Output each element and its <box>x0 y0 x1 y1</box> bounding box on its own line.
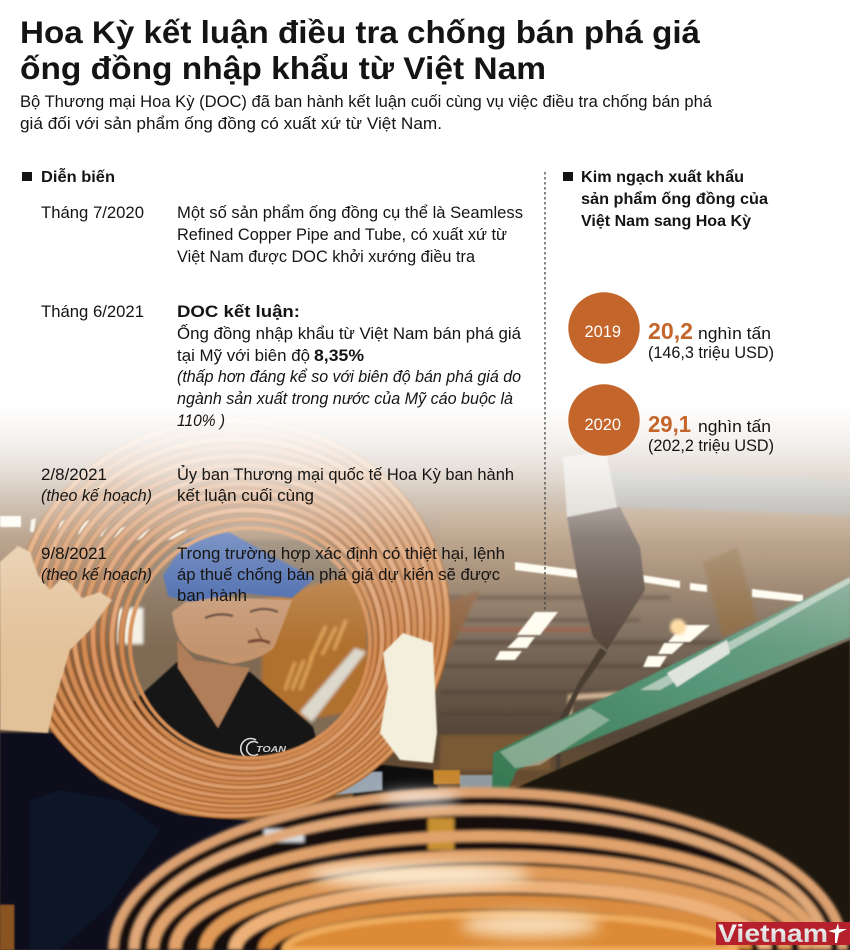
event: July 2020: Tháng 7/2020 <box>41 203 144 222</box>
event: 2 August 2021: 2/8/2021 <box>41 465 107 484</box>
heading: export turnover: Việt Nam sang Hoa Kỳ <box>581 213 751 230</box>
gloves <box>0 546 437 763</box>
stat: 2020 <box>568 384 774 456</box>
event: June 2021: ngành sản xuất trong nước của Mỹ cáo buộc là <box>177 389 513 408</box>
event: July 2020: Refined Copper Pipe and Tube, có xuất xứ từ <box>177 225 507 244</box>
stat: 2020: 29,1 <box>648 411 691 437</box>
green steel beam and dark machine <box>492 577 850 950</box>
event: June 2021: Ống đồng nhập khẩu từ Việt Nam bán phá giá <box>177 323 522 343</box>
stat: 2020: (202,2 triệu USD) <box>648 436 774 455</box>
intro text: giá đối với sản phẩm ống đồng có xuất xứ từ Việt Nam. <box>20 114 442 133</box>
worker <box>130 530 330 790</box>
panel: timeline <box>22 167 523 605</box>
logo on shirt <box>241 738 286 758</box>
stat: 2019: 20,2 <box>648 318 693 344</box>
title: ống đồng nhập khẩu từ Việt Nam <box>20 50 546 86</box>
highlight on lower coil <box>310 792 600 937</box>
heading: timeline: Diễn biến <box>41 167 115 186</box>
logo on shirt: TOAN <box>256 745 286 754</box>
event: 2 August 2021: (theo kế hoạch) <box>41 486 152 505</box>
upper coil of copper pipe <box>17 421 447 815</box>
ceiling lights <box>0 516 803 667</box>
event: 2 August 2021 <box>41 465 514 505</box>
dark sleeve and lower background <box>0 733 500 950</box>
event: 2 August 2021: kết luận cuối cùng <box>177 486 314 505</box>
intro text: Bộ Thương mại Hoa Kỳ (DOC) đã ban hành kết luận cuối cùng vụ việc điều tra chống bán phá <box>20 92 713 111</box>
logo: Vietnam+: Vietnam <box>718 920 828 948</box>
event: July 2020: Một số sản phẩm ống đồng cụ thể là Seamless <box>177 203 523 222</box>
lower coil of copper pipe <box>113 792 843 950</box>
intro text <box>20 92 713 133</box>
white fade over the photo <box>0 378 850 678</box>
title: Hoa Kỳ kết luận điều tra chống bán phá giá <box>20 14 701 50</box>
event: June 2021: (thấp hơn đáng kể so với biên độ bán phá giá do <box>177 367 521 386</box>
heading: export turnover: Kim ngạch xuất khẩu <box>581 168 744 186</box>
heading: export turnover: sản phẩm ống đồng của <box>581 190 768 208</box>
event: June 2021: DOC kết luận: <box>177 302 300 321</box>
heading: export turnover <box>563 168 768 230</box>
event: 9 August 2021: 9/8/2021 <box>41 544 107 563</box>
event: June 2021 <box>41 302 522 430</box>
event: 9 August 2021: Trong trường hợp xác định có thiệt hại, lệnh <box>177 544 505 563</box>
stat: 2019: (146,3 triệu USD) <box>648 343 774 362</box>
event: June 2021: 8,35% <box>314 346 364 365</box>
stat: 2020: 2020 <box>584 415 621 434</box>
event: 9 August 2021: (theo kế hoạch) <box>41 565 152 584</box>
stat: 2019 <box>568 292 774 364</box>
stat: 2019: nghìn tấn <box>698 324 771 343</box>
event: June 2021: Tháng 6/2021 <box>41 302 144 321</box>
event: July 2020 <box>41 203 523 266</box>
event: June 2021: tại Mỹ với biên độ <box>177 346 310 365</box>
background seen through the coil <box>117 540 370 770</box>
event: July 2020: Việt Nam được DOC khởi xướng điều tra <box>177 247 476 266</box>
hanging plastic sheet <box>556 452 645 770</box>
stat: 2020: nghìn tấn <box>698 417 771 436</box>
photo: copper pipe worker <box>0 380 850 950</box>
event: 9 August 2021 <box>41 544 505 605</box>
event: 2 August 2021: Ủy ban Thương mại quốc tế Hoa Kỳ ban hành <box>177 465 514 484</box>
title <box>20 14 701 86</box>
event: June 2021: 110% ) <box>177 411 225 430</box>
heading: timeline <box>22 167 115 186</box>
event: 9 August 2021: áp thuế chống bán phá giá dự kiến sẽ được <box>177 565 500 584</box>
stat: 2019: 2019 <box>584 322 621 341</box>
factory ceiling <box>440 470 850 770</box>
panel: export turnover <box>563 168 774 456</box>
event: 9 August 2021: ban hành <box>177 586 247 605</box>
